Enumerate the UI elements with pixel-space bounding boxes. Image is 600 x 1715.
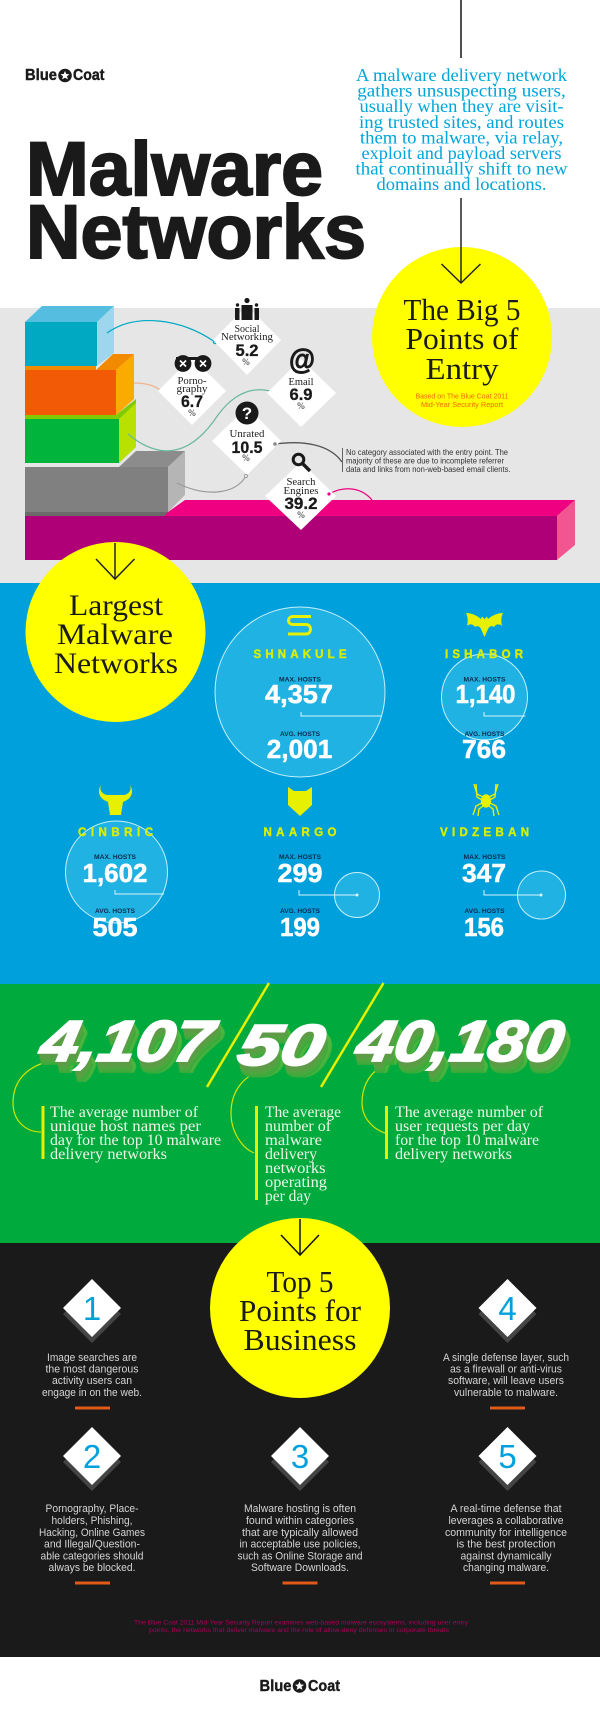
- item: email: Email: [288, 377, 314, 388]
- panel: header: [25, 65, 568, 275]
- network: ishabor: [442, 613, 528, 764]
- point 1: activity users can: [52, 1375, 132, 1387]
- title: Networks: [26, 190, 366, 275]
- intro text block: ing trusted sites, and routes: [359, 112, 564, 132]
- heading circle: the big 5 points of entry: The Big 5: [404, 292, 520, 327]
- network: vidzeban: [440, 784, 566, 942]
- icon: bull: [99, 785, 132, 815]
- stat description: delivery networks: networks: [265, 1160, 326, 1177]
- network: naargo: 199: [280, 914, 320, 942]
- heading circle: top 5 points for business: Points for: [239, 1293, 362, 1328]
- intro text block: [356, 65, 568, 194]
- item: unrated: Unrated: [230, 429, 264, 440]
- item: pornography: %: [188, 408, 196, 418]
- point 2: Hacking, Online Games: [39, 1527, 145, 1539]
- logo: Blue Coat bottom: Blue: [260, 1678, 292, 1695]
- network: shnakule: 4,357: [265, 681, 333, 709]
- diamonds: [158, 306, 336, 530]
- heading circle: largest malware networks: [26, 542, 206, 722]
- icon: search magnifier: [293, 454, 310, 471]
- item: email: [288, 377, 314, 411]
- heading circle: largest malware networks: Malware: [57, 618, 173, 651]
- point 3: Software Downloads.: [251, 1562, 349, 1574]
- item: pornography: 6.7: [181, 392, 203, 411]
- stat description: user requests: for the top 10 malware: [395, 1132, 539, 1149]
- point 5: A real-time defense that: [450, 1503, 562, 1515]
- item: unrated: [230, 429, 264, 463]
- icon: unrated question mark: [236, 402, 258, 424]
- panel: top 5 points for business: [0, 1243, 600, 1657]
- point 4: 4: [498, 1290, 517, 1327]
- point 4: [443, 1279, 569, 1410]
- point 4: software, will leave users: [448, 1375, 564, 1387]
- item: unrated: 10.5: [232, 438, 262, 457]
- point 5: 5: [498, 1438, 517, 1475]
- title: Malware: [26, 127, 323, 212]
- logo: Blue Coat bottom: Coat: [308, 1678, 340, 1695]
- point 4: as a firewall or anti-virus: [450, 1364, 562, 1376]
- network: shnakule: MAX. HOSTS: [279, 676, 322, 684]
- network: vidzeban: VIDZEBAN: [440, 827, 529, 839]
- item: pornography: graphy: [176, 384, 208, 395]
- stat description: host names: [42, 1104, 221, 1163]
- network: shnakule: AVG. HOSTS: [280, 731, 321, 738]
- point 3: that are typically allowed: [242, 1527, 358, 1539]
- stat description: user requests: [385, 1104, 544, 1163]
- item: search engines: Search: [286, 477, 316, 488]
- point 5: changing malware.: [463, 1562, 549, 1574]
- point 2: holders, Phishing,: [52, 1515, 132, 1527]
- footnote: [134, 1620, 469, 1634]
- icon: pornography glasses: [175, 355, 211, 372]
- heading circle: the big 5 points of entry: Points of: [406, 321, 519, 356]
- icon: spider: [473, 784, 499, 816]
- point 1: engage in on the web.: [42, 1387, 142, 1399]
- heading circle: the big 5 points of entry: Based on The Blue Coat 2011: [416, 392, 508, 400]
- network: naargo: 299: [278, 860, 322, 888]
- network: cinbric: MAX. HOSTS: [94, 854, 137, 861]
- point 1: 1: [83, 1290, 101, 1327]
- note: unrated explanation: [342, 448, 510, 474]
- intro text block: them to malware, via relay,: [360, 127, 563, 147]
- item: search engines: [284, 477, 319, 520]
- logo: Blue Coat top: [25, 67, 104, 84]
- point 1: [42, 1279, 142, 1410]
- item: social networking: %: [242, 357, 250, 367]
- stat description: delivery networks: The average: [265, 1104, 341, 1121]
- heading circle: the big 5 points of entry: [372, 247, 552, 427]
- intro text block: usually when they are visit-: [360, 96, 564, 116]
- panel: largest malware networks: [0, 583, 600, 984]
- arrow: into top 5: [281, 1219, 319, 1255]
- stat description: host names: delivery networks: [50, 1146, 167, 1163]
- point 5: is the best protection: [456, 1538, 556, 1550]
- stat number: 4,107: 4,107: [36, 1009, 219, 1074]
- point 5: against dynamically: [460, 1550, 552, 1562]
- heading circle: largest malware networks: Networks: [54, 647, 178, 680]
- network: cinbric: 505: [92, 914, 138, 942]
- bar: email green: [25, 399, 136, 463]
- item: social networking: [221, 324, 273, 367]
- heading circle: top 5 points for business: [210, 1218, 390, 1398]
- item: search engines: Engines: [284, 486, 319, 497]
- intro text block: exploit and payload servers: [362, 143, 562, 163]
- heading circle: top 5 points for business: Top 5: [266, 1264, 334, 1299]
- point 3: 3: [291, 1438, 309, 1475]
- network: vidzeban: MAX. HOSTS: [464, 854, 506, 861]
- item: unrated: %: [242, 453, 250, 463]
- network: shnakule: 2,001: [267, 736, 332, 764]
- point 5: community for intelligence: [445, 1527, 567, 1539]
- stat description: delivery networks: [255, 1104, 341, 1205]
- point 4: A single defense layer, such: [443, 1352, 569, 1364]
- item: social networking: Social: [234, 324, 260, 335]
- icon: unrated question mark: ?: [242, 404, 252, 423]
- item: search engines: 39.2: [284, 494, 318, 513]
- note: unrated explanation: No category associated with the entry point. The: [346, 448, 508, 457]
- point 2: 2: [83, 1438, 101, 1475]
- stat description: delivery networks: per day: [265, 1188, 311, 1205]
- icon: social networking people: [235, 298, 259, 320]
- stat description: user requests: delivery networks: [395, 1146, 512, 1163]
- arrow: into largest networks: [96, 543, 134, 579]
- item: email: 6.9: [290, 385, 312, 404]
- stat description: delivery networks: number of: [265, 1118, 332, 1135]
- intro text block: A malware delivery network: [356, 65, 567, 85]
- item: social networking: 5.2: [236, 341, 258, 360]
- point 2: and Illegal/Question-: [44, 1538, 140, 1550]
- item: social networking: Networking: [221, 332, 273, 343]
- heading circle: top 5 points for business: Business: [244, 1322, 356, 1357]
- stat number: 40,180: 40,180: [352, 1009, 570, 1074]
- icon: email at sign: @: [289, 344, 315, 376]
- network: ishabor: 1,140: [456, 681, 516, 709]
- panel: statistics: [0, 983, 600, 1243]
- network: cinbric: AVG. HOSTS: [95, 908, 136, 915]
- bar: pornography orange: [25, 354, 134, 415]
- item: search engines: %: [297, 510, 305, 520]
- network: shnakule: [215, 607, 385, 777]
- stat description: user requests: user requests per day: [395, 1118, 530, 1135]
- intro text block: domains and locations.: [376, 174, 546, 194]
- logo: Blue Coat bottom: [260, 1678, 340, 1695]
- point 5: leverages a collaborative: [448, 1515, 564, 1527]
- network: cinbric: 1,602: [82, 860, 148, 888]
- intro text block: gathers unsuspecting users,: [357, 81, 566, 101]
- network: ishabor: ISHABOR: [445, 649, 524, 661]
- title: [26, 127, 366, 275]
- network: vidzeban: 156: [464, 914, 504, 942]
- logo: Blue Coat top: Blue: [25, 67, 57, 84]
- stat number: 50: 50: [232, 1013, 331, 1078]
- arrow: into big 5: [442, 0, 480, 283]
- point 3: [238, 1427, 362, 1584]
- network: cinbric: [66, 785, 168, 942]
- point 1: Image searches are: [47, 1352, 137, 1364]
- network: naargo: MAX. HOSTS: [279, 854, 322, 861]
- point 3: Malware hosting is often: [244, 1503, 356, 1515]
- stat description: delivery networks: delivery: [265, 1146, 317, 1163]
- footnote: The Blue Coat 2011 Mid-Year Security Report examines web-based malware ecosystems, including user entry: [134, 1620, 469, 1626]
- point 5: [445, 1427, 567, 1584]
- point 2: Pornography, Place-: [46, 1503, 139, 1515]
- heading circle: largest malware networks: Largest: [69, 589, 164, 622]
- heading circle: the big 5 points of entry: Entry: [426, 351, 499, 386]
- point 3: in acceptable use policies,: [240, 1538, 360, 1550]
- network: cinbric: CINBRIC: [78, 827, 153, 839]
- connector curves: [107, 321, 372, 500]
- item: pornography: Porno-: [178, 376, 206, 387]
- network: naargo: [264, 787, 380, 942]
- stat description: host names: unique host names per: [50, 1118, 202, 1135]
- point 1: the most dangerous: [46, 1364, 139, 1376]
- stat description: delivery networks: operating: [265, 1174, 327, 1191]
- intro text block: that continually shift to new: [356, 159, 568, 179]
- item: pornography: [176, 376, 208, 418]
- point 2: always be blocked.: [48, 1562, 136, 1574]
- footnote: points, the networks that deliver malware and the role of allow-deny defenses in corporate threats: [149, 1627, 450, 1634]
- network: ishabor: 766: [462, 736, 506, 764]
- note: unrated explanation: data and links from non-web-based email clients.: [346, 465, 510, 474]
- stat curves: [13, 1060, 385, 1153]
- network: ishabor: MAX. HOSTS: [464, 676, 506, 684]
- panel: big 5 points of entry: [0, 298, 600, 584]
- bar: search engines magenta: [25, 500, 575, 560]
- point 3: such as Online Storage and: [238, 1550, 362, 1562]
- point 4: vulnerable to malware.: [454, 1387, 558, 1399]
- network: vidzeban: AVG. HOSTS: [464, 908, 505, 915]
- bar: social networking cyan: [25, 306, 114, 366]
- point 2: [39, 1427, 145, 1584]
- network: shnakule: SHNAKULE: [254, 649, 347, 661]
- network: ishabor: AVG. HOSTS: [464, 731, 505, 738]
- network: naargo: AVG. HOSTS: [280, 908, 321, 915]
- stat description: host names: day for the top 10 malware: [50, 1132, 221, 1149]
- note: unrated explanation: majority of these are due to incomplete referrer: [346, 456, 504, 466]
- item: email: %: [297, 401, 305, 411]
- point 3: found within categories: [246, 1515, 354, 1527]
- icon: cat: [288, 787, 312, 816]
- network: naargo: NAARGO: [264, 827, 337, 839]
- network: vidzeban: 347: [462, 860, 506, 888]
- point 2: able categories should: [40, 1550, 144, 1562]
- bar: unrated gray: [25, 451, 185, 516]
- stat description: user requests: The average number of: [395, 1104, 544, 1121]
- logo: Blue Coat top: Coat: [73, 67, 104, 84]
- stat description: host names: The average number of: [50, 1104, 199, 1121]
- icon: snake: [288, 616, 311, 634]
- stat description: delivery networks: malware: [265, 1132, 322, 1149]
- heading circle: the big 5 points of entry: Mid-Year Security Report: [421, 400, 504, 409]
- slash dividers: [207, 983, 384, 1087]
- icon: bat: [466, 613, 503, 637]
